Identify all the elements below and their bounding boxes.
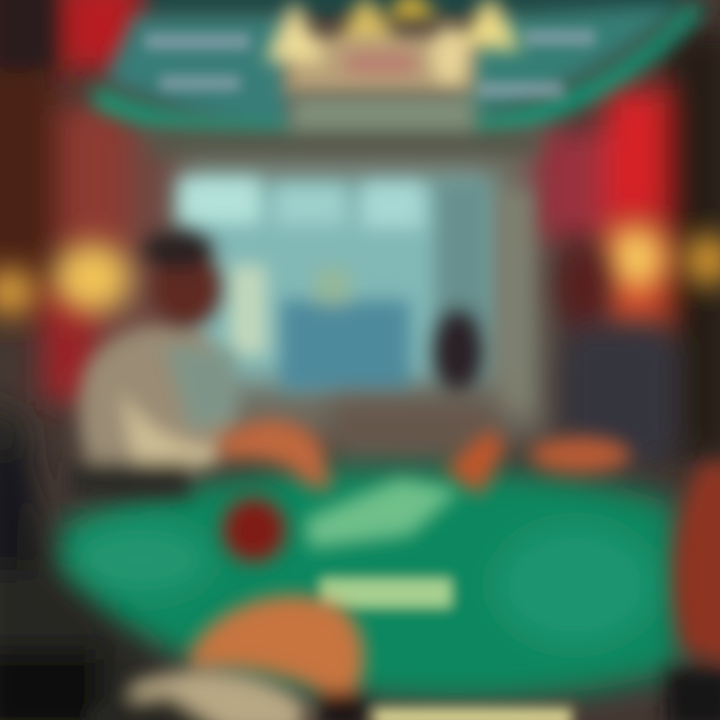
left red wall [0, 0, 142, 400]
bright window [182, 178, 492, 383]
side column [498, 190, 532, 410]
foreground left shoulder [0, 400, 170, 720]
wall lamps [0, 228, 720, 316]
green awning [92, 0, 702, 138]
left player head [142, 230, 222, 328]
awning lettering glow [145, 30, 595, 97]
left player torso [70, 325, 239, 498]
bottom table edge [372, 708, 572, 720]
back figure silhouette [432, 310, 484, 394]
red chip stack [222, 498, 286, 562]
table highlights [70, 524, 655, 645]
right red wall [535, 30, 720, 460]
top dark band [0, 0, 680, 70]
foreground right arm [665, 460, 720, 720]
betting line on table [320, 578, 452, 608]
dealer hands [445, 430, 630, 495]
foreground hand [90, 596, 365, 720]
ceiling beam under sign [150, 95, 540, 156]
mid lower background [330, 398, 500, 464]
right seated player [556, 241, 680, 465]
gold crown sign [265, 0, 522, 95]
back wall [60, 120, 550, 440]
left player arm [218, 420, 330, 492]
light card area on table [305, 478, 460, 548]
window details [180, 178, 490, 390]
green poker table [50, 467, 680, 700]
